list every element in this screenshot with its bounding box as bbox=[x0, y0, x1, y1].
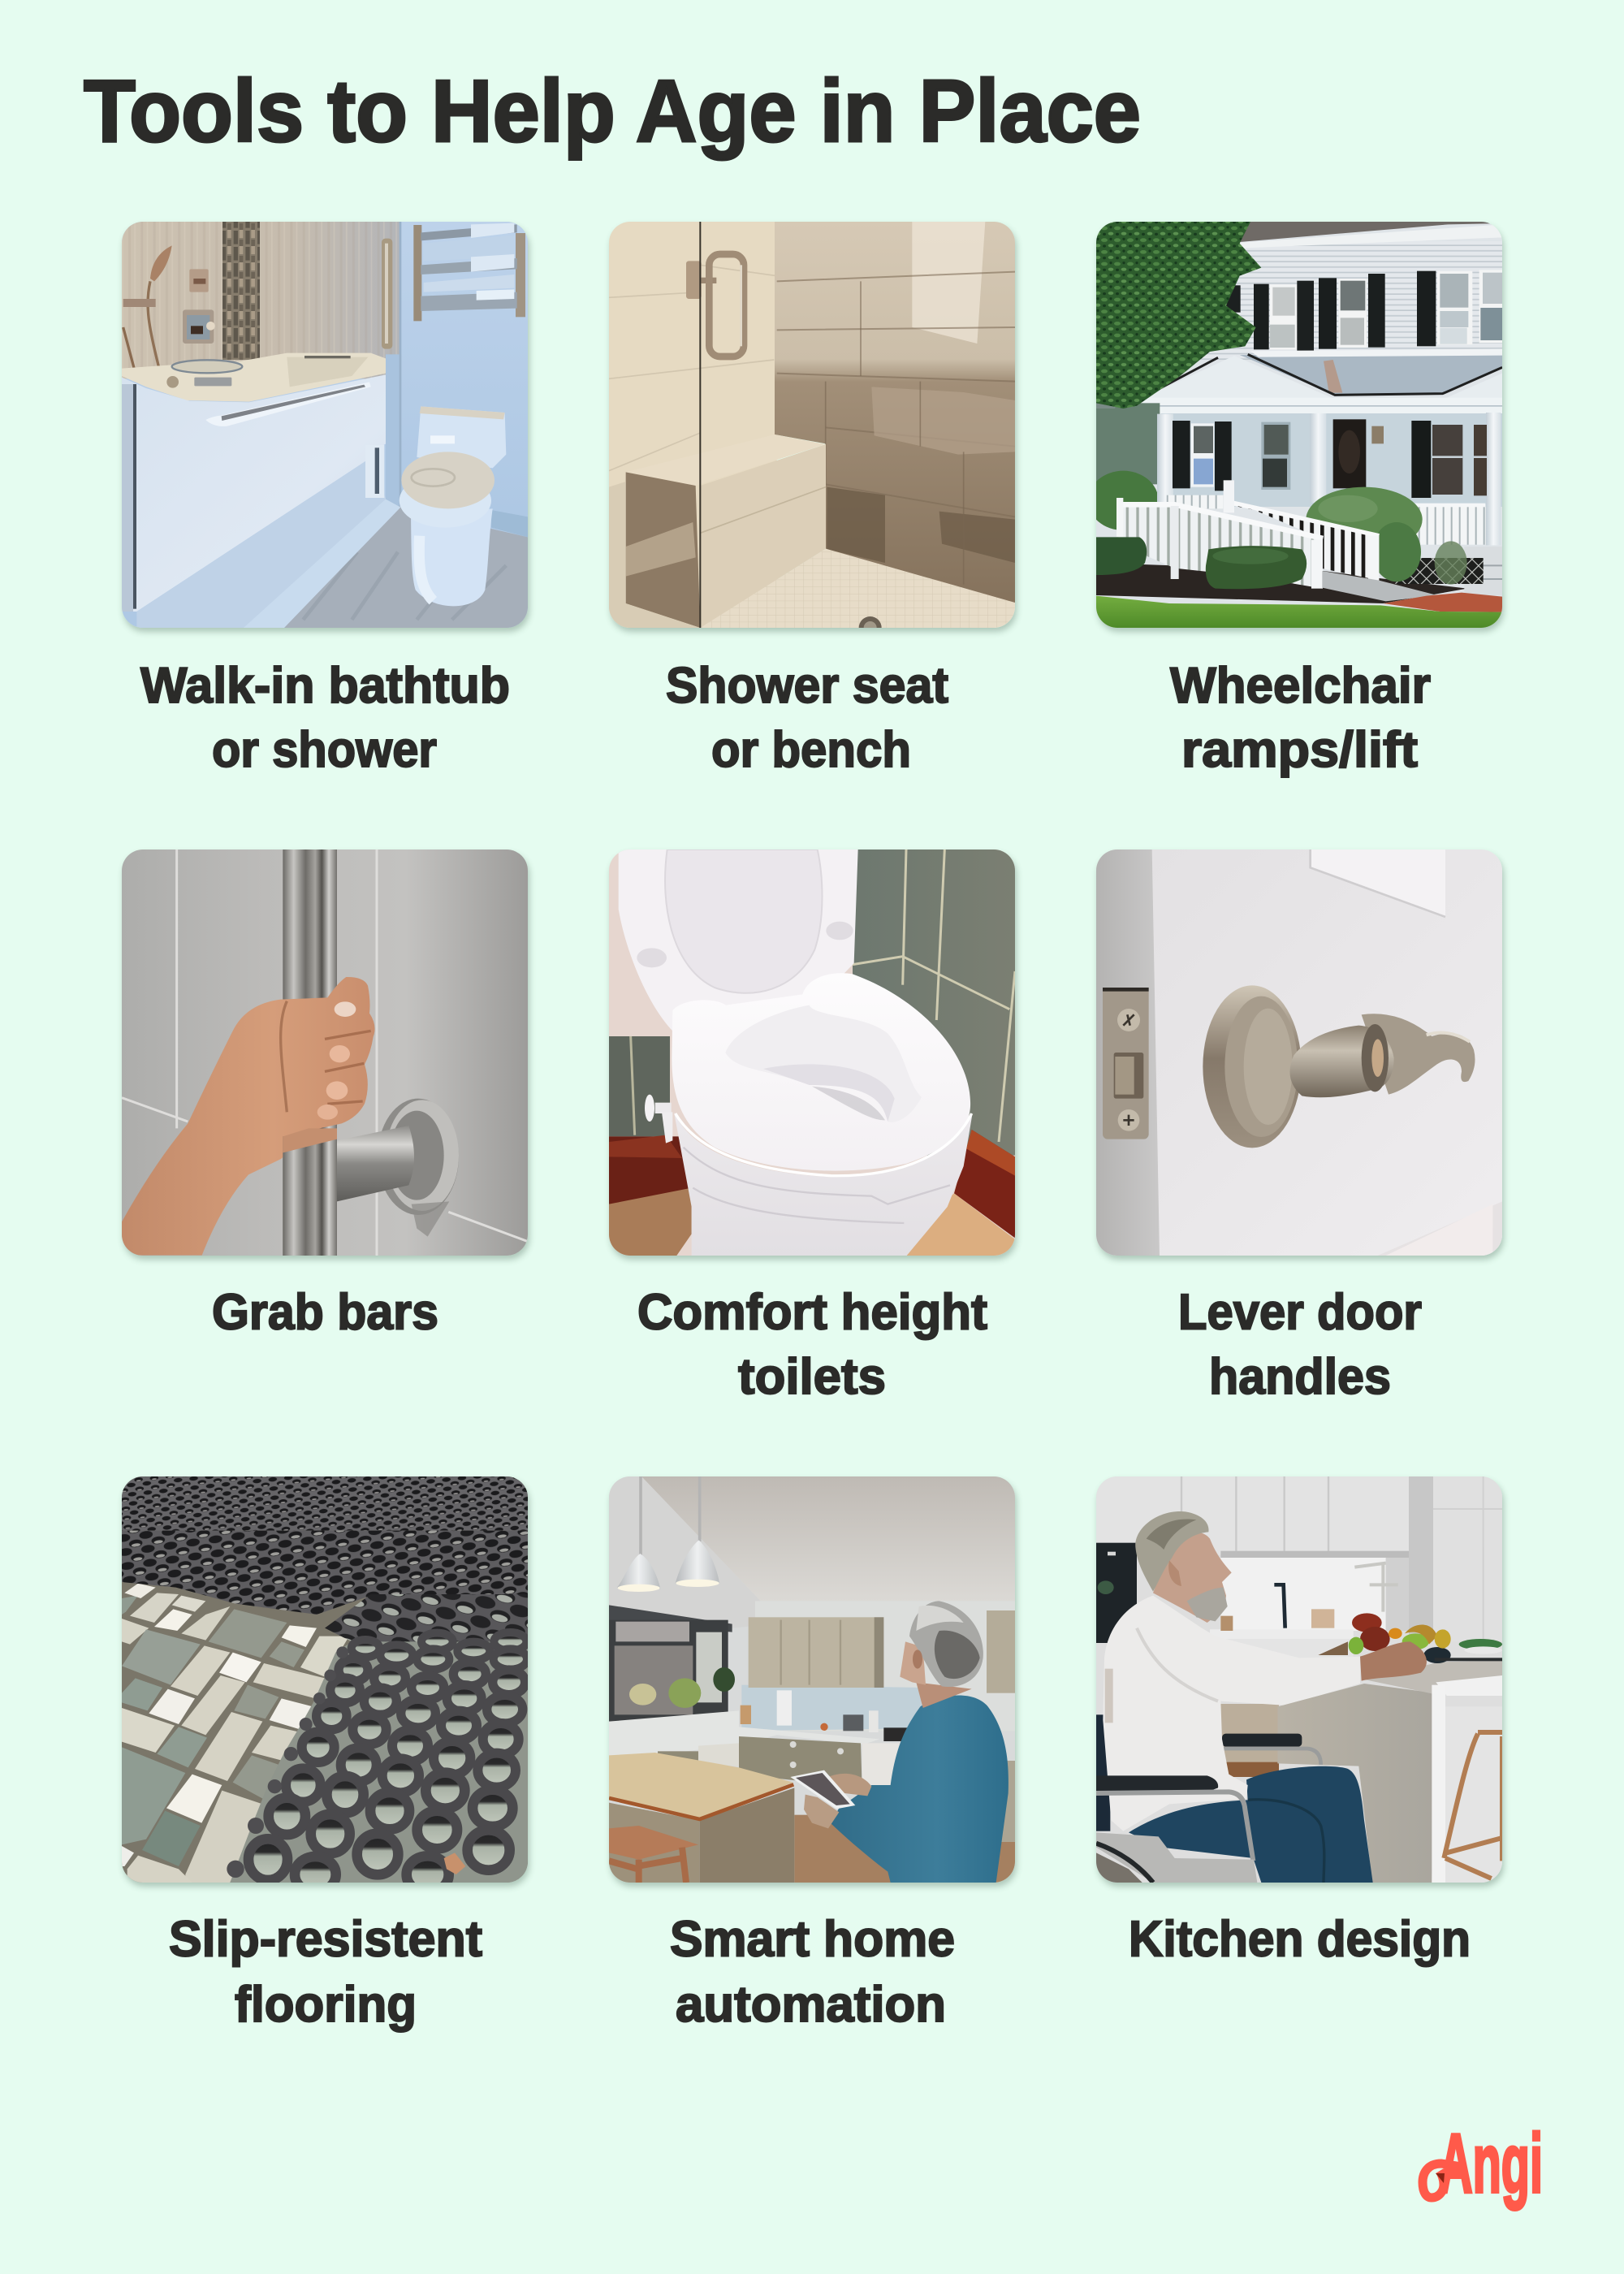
skirting bbox=[609, 1130, 1015, 1238]
jeans bbox=[1129, 1766, 1373, 1883]
ceiling and wall bbox=[609, 1476, 1015, 1731]
label: Shower seat bbox=[666, 658, 948, 714]
label: ramps/lift bbox=[1181, 722, 1418, 778]
stool bbox=[1444, 1732, 1502, 1878]
toilet bbox=[400, 406, 506, 606]
photo: shower seat or bench bbox=[609, 222, 1015, 628]
photo: man in wheelchair at kitchen counter bbox=[1096, 1476, 1502, 1883]
rubber mat, far rows bbox=[122, 1476, 528, 1658]
door jamb bbox=[1096, 850, 1160, 1256]
island bbox=[609, 1753, 794, 1883]
mulch bbox=[1096, 563, 1467, 603]
counter and items bbox=[1210, 1563, 1398, 1777]
oven bbox=[1096, 1543, 1137, 1643]
bar below hand bbox=[283, 1136, 337, 1256]
panel: grab bars bbox=[120, 850, 533, 1340]
label bbox=[670, 1912, 955, 2033]
panel: kitchen design bbox=[1095, 1476, 1507, 1967]
label: Walk-in bathtub bbox=[140, 658, 510, 714]
label: Slip-resistent bbox=[169, 1912, 482, 1967]
label bbox=[169, 1912, 482, 2033]
panel: slip-resistant flooring bbox=[120, 1476, 533, 2033]
photo: rubber mat over tile floor bbox=[122, 1476, 528, 1883]
shirt bbox=[1103, 1596, 1360, 1831]
island bbox=[1277, 1661, 1502, 1883]
label: Grab bars bbox=[212, 1285, 438, 1340]
wheelchair ramp bbox=[1116, 480, 1379, 589]
stool bbox=[609, 1826, 698, 1883]
photo: man with tablet in kitchen bbox=[609, 1476, 1015, 1883]
raised seat bbox=[672, 973, 972, 1176]
seat lid bbox=[619, 850, 858, 1031]
label: flooring bbox=[235, 1977, 417, 2033]
floor bbox=[700, 549, 1015, 628]
grab bar bbox=[382, 239, 392, 349]
photo: walk-in bathtub and toilet bbox=[122, 222, 528, 628]
door handle bbox=[686, 254, 744, 357]
towel warmer bbox=[413, 223, 525, 321]
upper windows bbox=[1183, 270, 1502, 356]
label: Kitchen design bbox=[1129, 1912, 1471, 1967]
photo: raised toilet seat bbox=[609, 850, 1015, 1256]
label: or bench bbox=[711, 722, 911, 778]
man's sweater bbox=[831, 1696, 1009, 1883]
trees bbox=[1088, 222, 1261, 530]
walkway bbox=[1322, 571, 1437, 601]
label bbox=[666, 658, 948, 778]
head bbox=[1135, 1511, 1232, 1623]
wall tiles bbox=[609, 850, 1015, 1156]
label: Comfort height bbox=[637, 1285, 987, 1340]
door panels bbox=[1311, 850, 1502, 1256]
base body bbox=[674, 1112, 972, 1256]
label: Wheelchair bbox=[1170, 658, 1431, 714]
latch plate bbox=[1103, 988, 1149, 1139]
panel: shower seat bbox=[607, 222, 1020, 778]
wall tile grout bbox=[122, 850, 528, 1256]
wall flange bbox=[378, 1099, 459, 1237]
window bbox=[609, 1605, 792, 1726]
porch columns bbox=[1157, 413, 1501, 545]
stairs and lattice bbox=[1395, 547, 1502, 595]
panel: wheelchair ramps bbox=[1095, 222, 1507, 778]
backsplash bbox=[741, 1685, 926, 1731]
bench bbox=[609, 434, 826, 628]
photo: hand on grab bar bbox=[122, 850, 528, 1256]
tile wall bbox=[122, 222, 400, 378]
wheelchair front bbox=[1096, 1775, 1257, 1883]
shower fixtures bbox=[123, 245, 215, 384]
shrub by porch bbox=[1306, 487, 1467, 585]
label: toilets bbox=[738, 1349, 886, 1405]
label: Smart home bbox=[670, 1912, 955, 1967]
brick path bbox=[1383, 593, 1502, 612]
hand bbox=[1360, 1641, 1427, 1681]
tablet and hands bbox=[790, 1770, 871, 1828]
label: Lever door bbox=[1178, 1285, 1422, 1340]
blue wall bbox=[400, 222, 528, 517]
panel: comfort height toilets bbox=[607, 850, 1020, 1405]
side knob bbox=[645, 1095, 672, 1143]
pendant lamps bbox=[617, 1476, 719, 1592]
label: or shower bbox=[212, 722, 437, 778]
tile floor bbox=[122, 1476, 528, 1883]
stove and counter items bbox=[820, 1710, 911, 1822]
glass edge bbox=[699, 222, 701, 628]
panel: lever door handles bbox=[1095, 850, 1507, 1405]
standoff bbox=[337, 1126, 414, 1201]
floor bbox=[609, 1188, 692, 1256]
glass column bbox=[386, 354, 401, 506]
porch wall bbox=[1161, 413, 1502, 507]
panel: smart home automation bbox=[607, 1476, 1020, 2033]
label bbox=[637, 1285, 987, 1405]
hand bbox=[122, 977, 375, 1256]
porch roof bbox=[1142, 349, 1502, 413]
upper cabinets bbox=[749, 1610, 1015, 1693]
label bbox=[1178, 1285, 1422, 1405]
vertical bar bbox=[283, 850, 337, 1256]
label: automation bbox=[676, 1977, 946, 2033]
title: Tools to Help Age in Place bbox=[84, 62, 1141, 161]
upper siding and roof bbox=[1180, 222, 1502, 360]
lawn bbox=[1096, 596, 1502, 628]
rubber mat, near surface bbox=[230, 1641, 528, 1883]
tub rim bbox=[122, 353, 386, 402]
label bbox=[1169, 658, 1431, 778]
upper cabinets bbox=[1096, 1476, 1502, 1641]
label bbox=[140, 658, 510, 778]
floor bbox=[244, 499, 528, 628]
photo: lever door handle bbox=[1096, 850, 1502, 1256]
lever handle bbox=[1203, 985, 1475, 1148]
floor bbox=[794, 1761, 1015, 1883]
panel: walk-in bathtub bbox=[120, 222, 533, 778]
countertop bbox=[609, 1710, 879, 1759]
label: handles bbox=[1209, 1349, 1391, 1405]
base cabinets and sink bbox=[658, 1736, 862, 1788]
rubber mat, near rings bbox=[248, 1632, 527, 1893]
porch railing bbox=[1167, 495, 1485, 545]
tub front bbox=[122, 374, 386, 628]
wood tile wall bbox=[775, 222, 1015, 603]
fruit bowl bbox=[1318, 1613, 1502, 1663]
photo: house with wheelchair ramp bbox=[1096, 222, 1502, 628]
ground floor windows bbox=[1173, 419, 1487, 498]
man's head bbox=[900, 1601, 983, 1708]
wheelchair rear parts bbox=[1096, 1714, 1321, 1831]
mat connector nubs and leaf bbox=[227, 1646, 465, 1878]
hedges bbox=[1096, 537, 1307, 589]
